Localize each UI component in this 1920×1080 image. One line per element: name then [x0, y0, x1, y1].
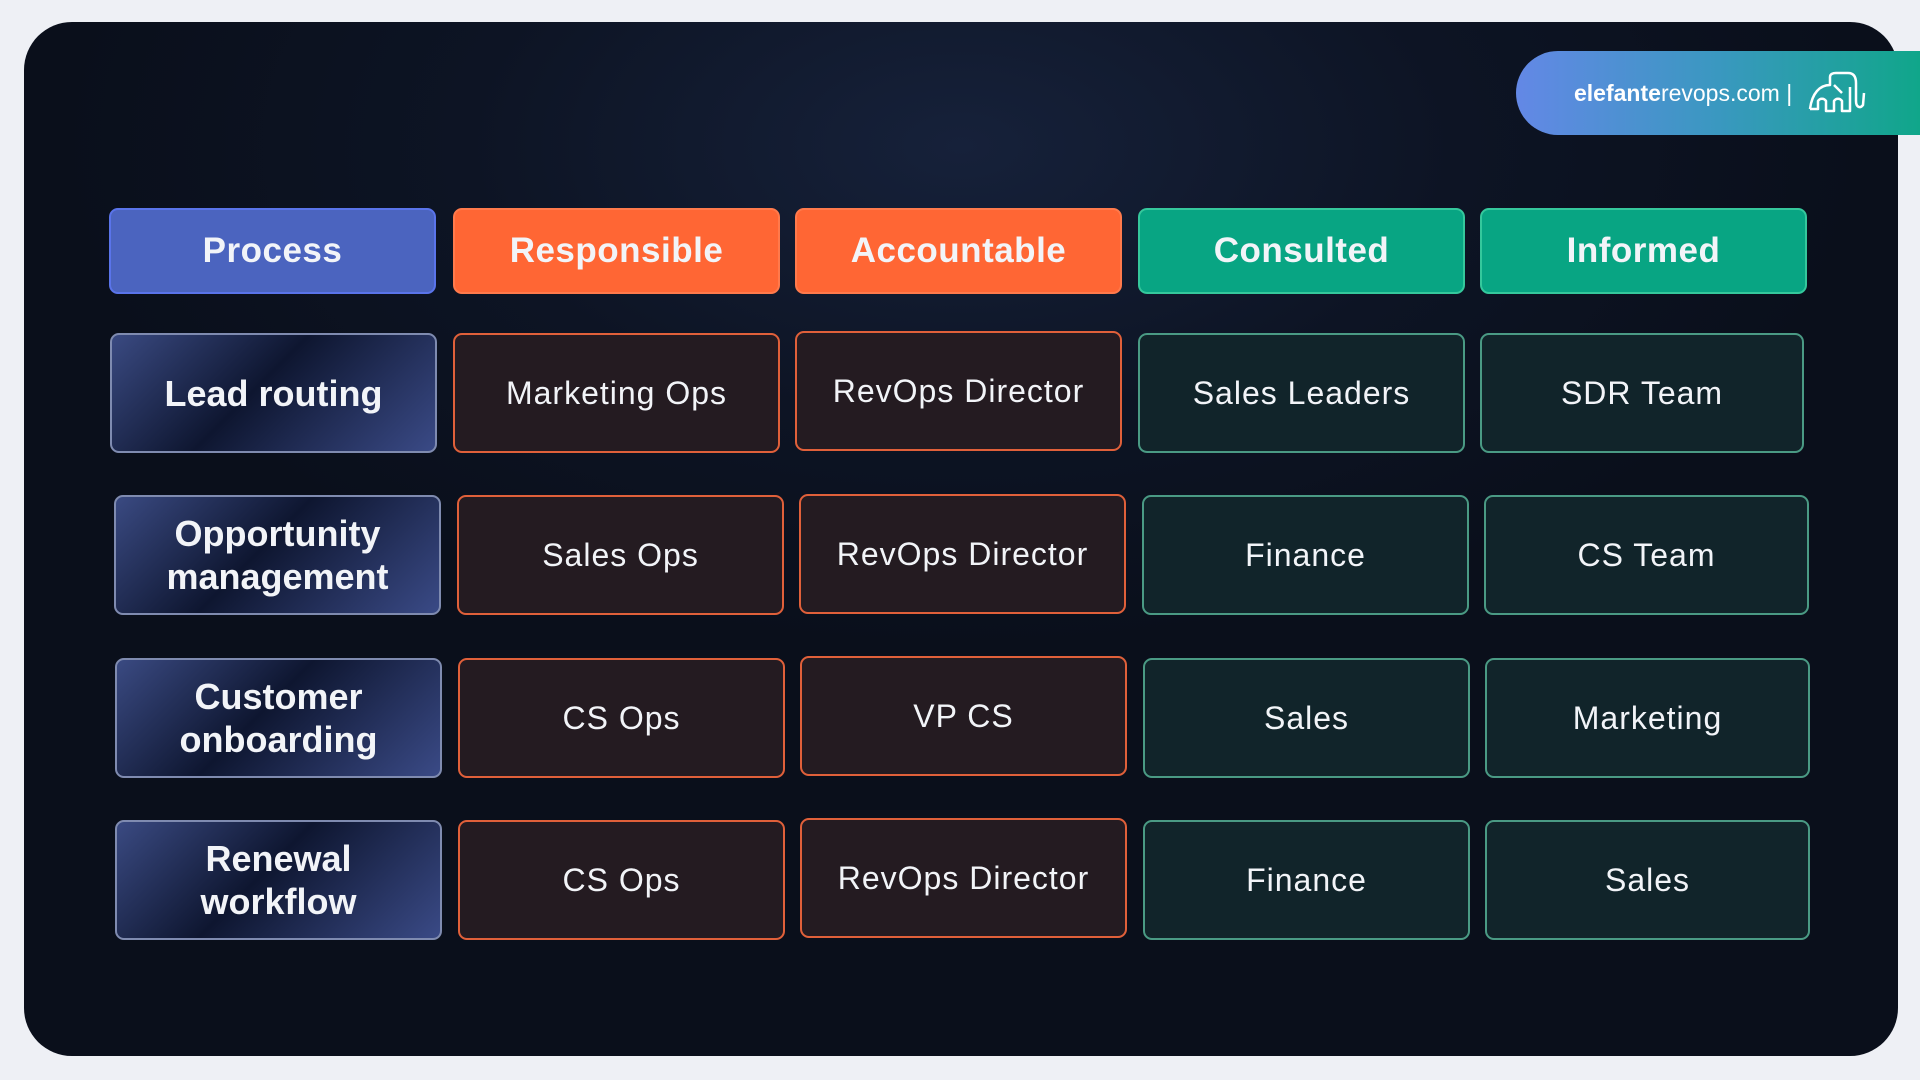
process cell: [114, 495, 441, 615]
accountable cell: [799, 494, 1126, 614]
informed cell: [1480, 333, 1804, 453]
informed cell: [1485, 820, 1810, 940]
header: Responsible: [453, 208, 780, 294]
process cell: onboarding: [180, 719, 377, 760]
process cell: Lead routing: [164, 372, 382, 414]
process cell: Renewal: [205, 838, 352, 879]
responsible cell: [453, 333, 780, 453]
process cell: workflow: [200, 881, 356, 922]
informed cell: CS Team: [1577, 536, 1716, 572]
row: Lead routing: [110, 331, 1804, 453]
informed cell: Sales: [1605, 862, 1690, 898]
accountable cell: RevOps Director: [833, 372, 1084, 408]
accountable cell: RevOps Director: [838, 860, 1089, 896]
icon: elephant: [1808, 72, 1866, 112]
responsible cell: [458, 658, 785, 778]
accountable cell: RevOps Director: [837, 536, 1088, 572]
process cell: Opportunity: [174, 513, 380, 554]
header: Accountable: [795, 208, 1122, 294]
process cell: [115, 820, 442, 940]
header: Responsible: Responsible: [510, 231, 723, 270]
consulted cell: [1142, 495, 1469, 615]
accountable cell: [795, 331, 1122, 451]
row: Opportunity management: [114, 494, 1809, 615]
accountable cell: VP CS: [913, 698, 1014, 734]
process cell: management: [166, 556, 389, 597]
responsible cell: Marketing Ops: [506, 374, 727, 410]
consulted cell: [1138, 333, 1465, 453]
informed cell: [1485, 658, 1810, 778]
header: Accountable: Accountable: [851, 231, 1066, 270]
responsible cell: [457, 495, 784, 615]
informed cell: Marketing: [1573, 700, 1722, 736]
process cell: Customer: [194, 676, 363, 717]
header: Process: Process: [203, 231, 342, 270]
header: Consulted: Consulted: [1214, 231, 1389, 270]
consulted cell: Sales: [1264, 700, 1349, 736]
logo pill: elefanterevops.com |: [1574, 80, 1792, 106]
consulted cell: Finance: [1245, 536, 1366, 572]
header: Informed: Informed: [1567, 231, 1720, 270]
consulted cell: Sales Leaders: [1193, 374, 1410, 410]
consulted cell: [1143, 658, 1470, 778]
consulted cell: [1143, 820, 1470, 940]
consulted cell: Finance: [1246, 862, 1367, 898]
header: Process: [109, 208, 436, 294]
responsible cell: Sales Ops: [542, 536, 699, 572]
accountable cell: [800, 656, 1127, 776]
row: Customer onboarding: [115, 656, 1810, 778]
informed cell: [1484, 495, 1809, 615]
header: Consulted: [1138, 208, 1465, 294]
logo pill: [1516, 51, 1920, 135]
process cell: [115, 658, 442, 778]
responsible cell: [458, 820, 785, 940]
responsible cell: CS Ops: [562, 862, 681, 898]
accountable cell: [800, 818, 1127, 938]
header: Informed: [1480, 208, 1807, 294]
row: Renewal workflow: [115, 818, 1810, 940]
process cell: [110, 333, 437, 453]
responsible cell: CS Ops: [562, 700, 681, 736]
informed cell: SDR Team: [1561, 374, 1723, 410]
